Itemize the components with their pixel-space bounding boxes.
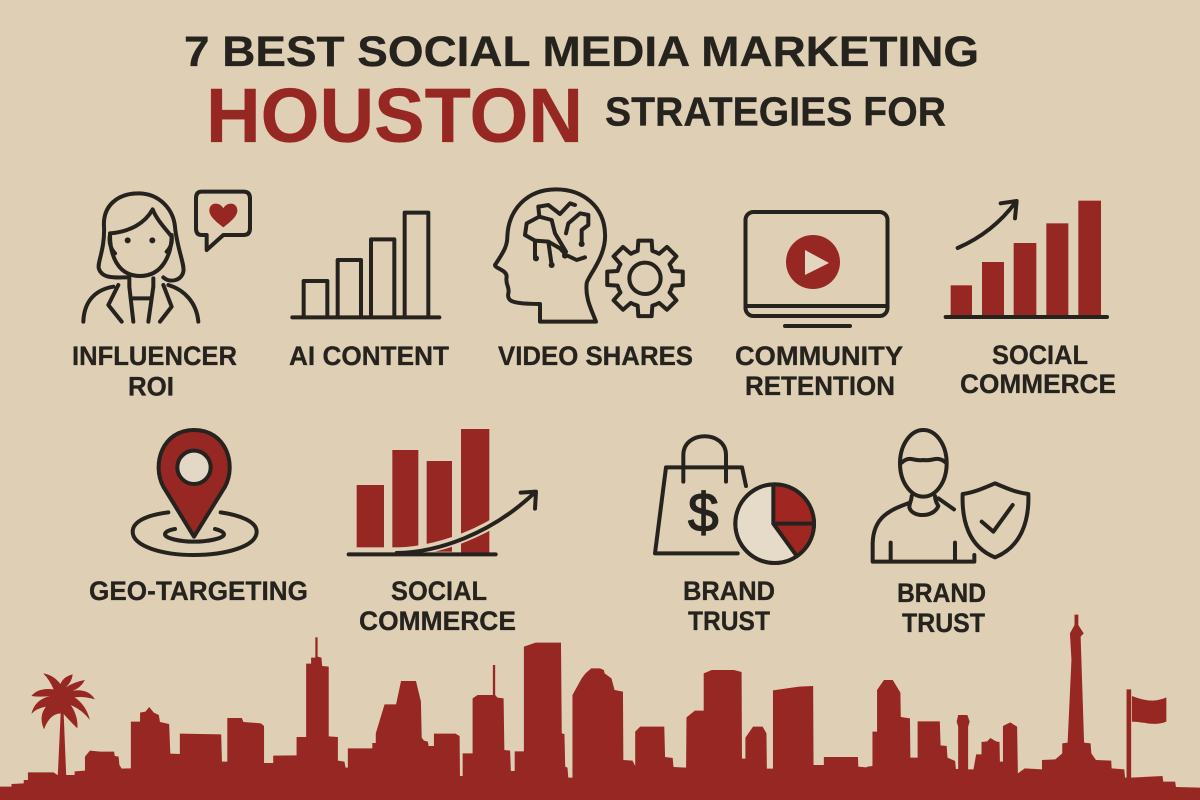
icon: head with circuit brain and gear — [495, 189, 683, 322]
label: brand trust (right): TRUST — [902, 608, 985, 638]
label: community retention: COMMUNITY — [735, 341, 903, 371]
title: 7 BEST SOCIAL MEDIA MARKETING — [184, 28, 979, 76]
label: brand trust (right) — [897, 578, 986, 638]
label: brand trust (left): BRAND — [683, 576, 775, 606]
houston skyline silhouette with palm tree and flag — [0, 615, 1200, 800]
title — [184, 28, 979, 159]
title: STRATEGIES FOR — [605, 88, 946, 134]
label: ai content: AI CONTENT — [289, 341, 449, 371]
icon: shopping bag with pie chart: $ — [688, 482, 719, 544]
icon: red bars with sweeping arrow — [349, 429, 536, 554]
label: brand trust (right): BRAND — [897, 578, 986, 608]
label: brand trust (left) — [683, 576, 775, 636]
label: social commerce (bottom row): COMMERCE — [359, 606, 516, 636]
icon: shopping bag with pie chart — [655, 436, 814, 563]
label: social commerce (top row): SOCIAL — [992, 340, 1088, 370]
label: social commerce (bottom row): SOCIAL — [391, 576, 487, 606]
icon: red rising bars with arrow — [946, 201, 1107, 317]
label: brand trust (left): TRUST — [688, 606, 770, 636]
label: influencer roi: ROI — [128, 372, 174, 402]
label: influencer roi: INFLUENCER — [72, 341, 237, 371]
label: social commerce (top row) — [960, 340, 1116, 399]
label: influencer roi — [72, 341, 237, 402]
icon: influencer with heart speech bubble — [83, 192, 250, 322]
title: HOUSTON — [206, 73, 583, 159]
icon: map pin with target rings — [133, 430, 257, 555]
label: geo-targeting: GEO-TARGETING — [89, 576, 308, 606]
label: community retention — [735, 341, 903, 401]
label: community retention: RETENTION — [745, 371, 895, 401]
label: video shares: VIDEO SHARES — [498, 341, 693, 371]
label: social commerce (bottom row) — [359, 576, 516, 636]
icon: outline bar chart — [292, 213, 439, 317]
label: social commerce (top row): COMMERCE — [960, 369, 1116, 399]
icon: person with check shield — [873, 430, 1028, 562]
icon: video monitor with play button — [746, 212, 888, 326]
